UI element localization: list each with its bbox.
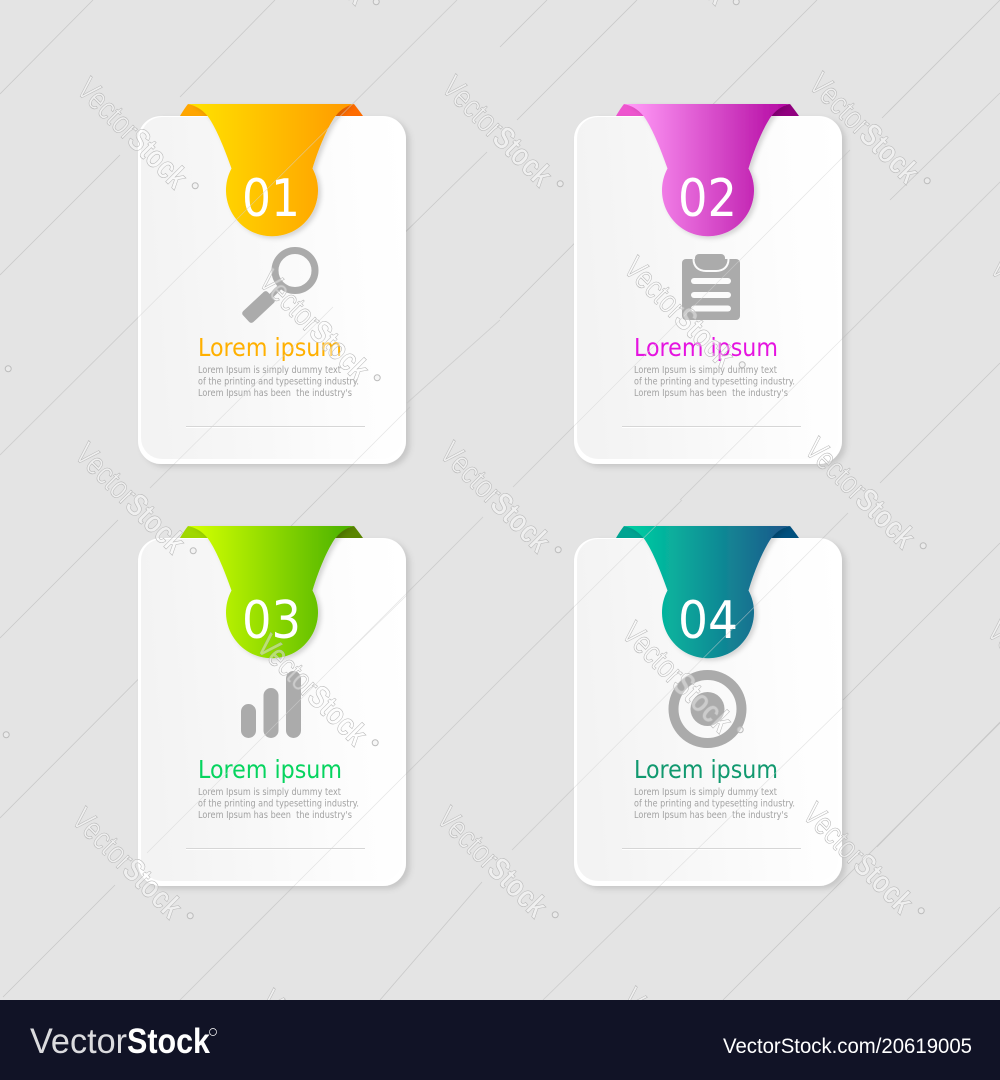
heading 03: Lorem ipsum: [198, 755, 342, 784]
text block 03: Lorem Ipsum is simply dummy text: [198, 787, 341, 798]
text block 01: Lorem Ipsum has been the industry's: [198, 388, 352, 399]
icon: bar chart: [241, 671, 301, 738]
ribbon tab 03: [188, 526, 354, 658]
text block 02: of the printing and typesetting industry.: [634, 376, 795, 388]
ribbon tab 04: [624, 526, 790, 658]
card 01: [138, 104, 406, 464]
text block 02: [634, 365, 795, 399]
watermarks: VectorStock: [435, 69, 560, 194]
watermarks: VectorStock: [430, 800, 555, 925]
text block 04: Lorem Ipsum is simply dummy text: [634, 787, 777, 798]
watermarks: VectorStock: [433, 435, 558, 560]
text block 02: Lorem Ipsum is simply dummy text: [634, 365, 777, 376]
panel 02: [574, 116, 842, 464]
watermarks: VectorStock: [68, 436, 193, 561]
watermarks: VectorStock: [617, 250, 742, 375]
footer logo: Stock: [127, 1022, 210, 1061]
text block 04: of the printing and typesetting industry.: [634, 798, 795, 810]
text block 04: Lorem Ipsum has been the industry's: [634, 810, 788, 821]
watermarks: VectorStock: [796, 796, 921, 921]
ribbon folds 04: [616, 526, 799, 538]
watermarks: VectorStock: [802, 66, 927, 191]
icon: magnifying glass: [241, 250, 315, 324]
text block 01: of the printing and typesetting industry.: [198, 376, 359, 388]
text block 03: of the printing and typesetting industry.: [198, 798, 359, 810]
number 01: 01: [242, 169, 300, 229]
number 04: 04: [678, 591, 738, 651]
text block 03: [198, 787, 359, 821]
panel 03: [138, 538, 406, 886]
watermarks: VectorStock: [70, 71, 195, 196]
ribbon tab 01: [188, 104, 354, 236]
watermarks: VectorStock: [65, 801, 190, 926]
heading 04: Lorem ipsum: [634, 755, 778, 784]
watermarks: VectorStock: [798, 431, 923, 556]
text block 03: Lorem Ipsum has been the industry's: [198, 810, 352, 821]
footer logo: [30, 1022, 216, 1061]
panel 04: [574, 538, 842, 886]
panel 01: [138, 116, 406, 464]
text block 02: Lorem Ipsum has been the industry's: [634, 388, 788, 399]
footer logo: Vector: [30, 1022, 127, 1061]
card 02: [574, 104, 842, 464]
number 03: 03: [242, 591, 301, 651]
ribbon folds 02: [616, 104, 799, 116]
footer image id: VectorStock.com/20619005: [723, 1035, 972, 1058]
watermarks: VectorStock: [252, 263, 377, 388]
heading 02: Lorem ipsum: [634, 333, 778, 362]
footer bar: [0, 1000, 1000, 1080]
card 04: [574, 526, 842, 886]
icon: target: [674, 675, 742, 743]
card 03: [138, 526, 406, 886]
icon: clipboard: [682, 254, 740, 320]
text block 01: Lorem Ipsum is simply dummy text: [198, 365, 341, 376]
ribbon folds 01: [180, 104, 363, 116]
text block 01: [198, 365, 359, 399]
ribbon folds 03: [180, 526, 363, 538]
number 02: 02: [678, 169, 737, 229]
text block 04: [634, 787, 795, 821]
watermarks: VectorStock: [615, 615, 740, 740]
watermarks: VectorStock: [250, 628, 375, 753]
heading 01: Lorem ipsum: [198, 333, 342, 362]
ribbon tab 02: [624, 104, 790, 236]
